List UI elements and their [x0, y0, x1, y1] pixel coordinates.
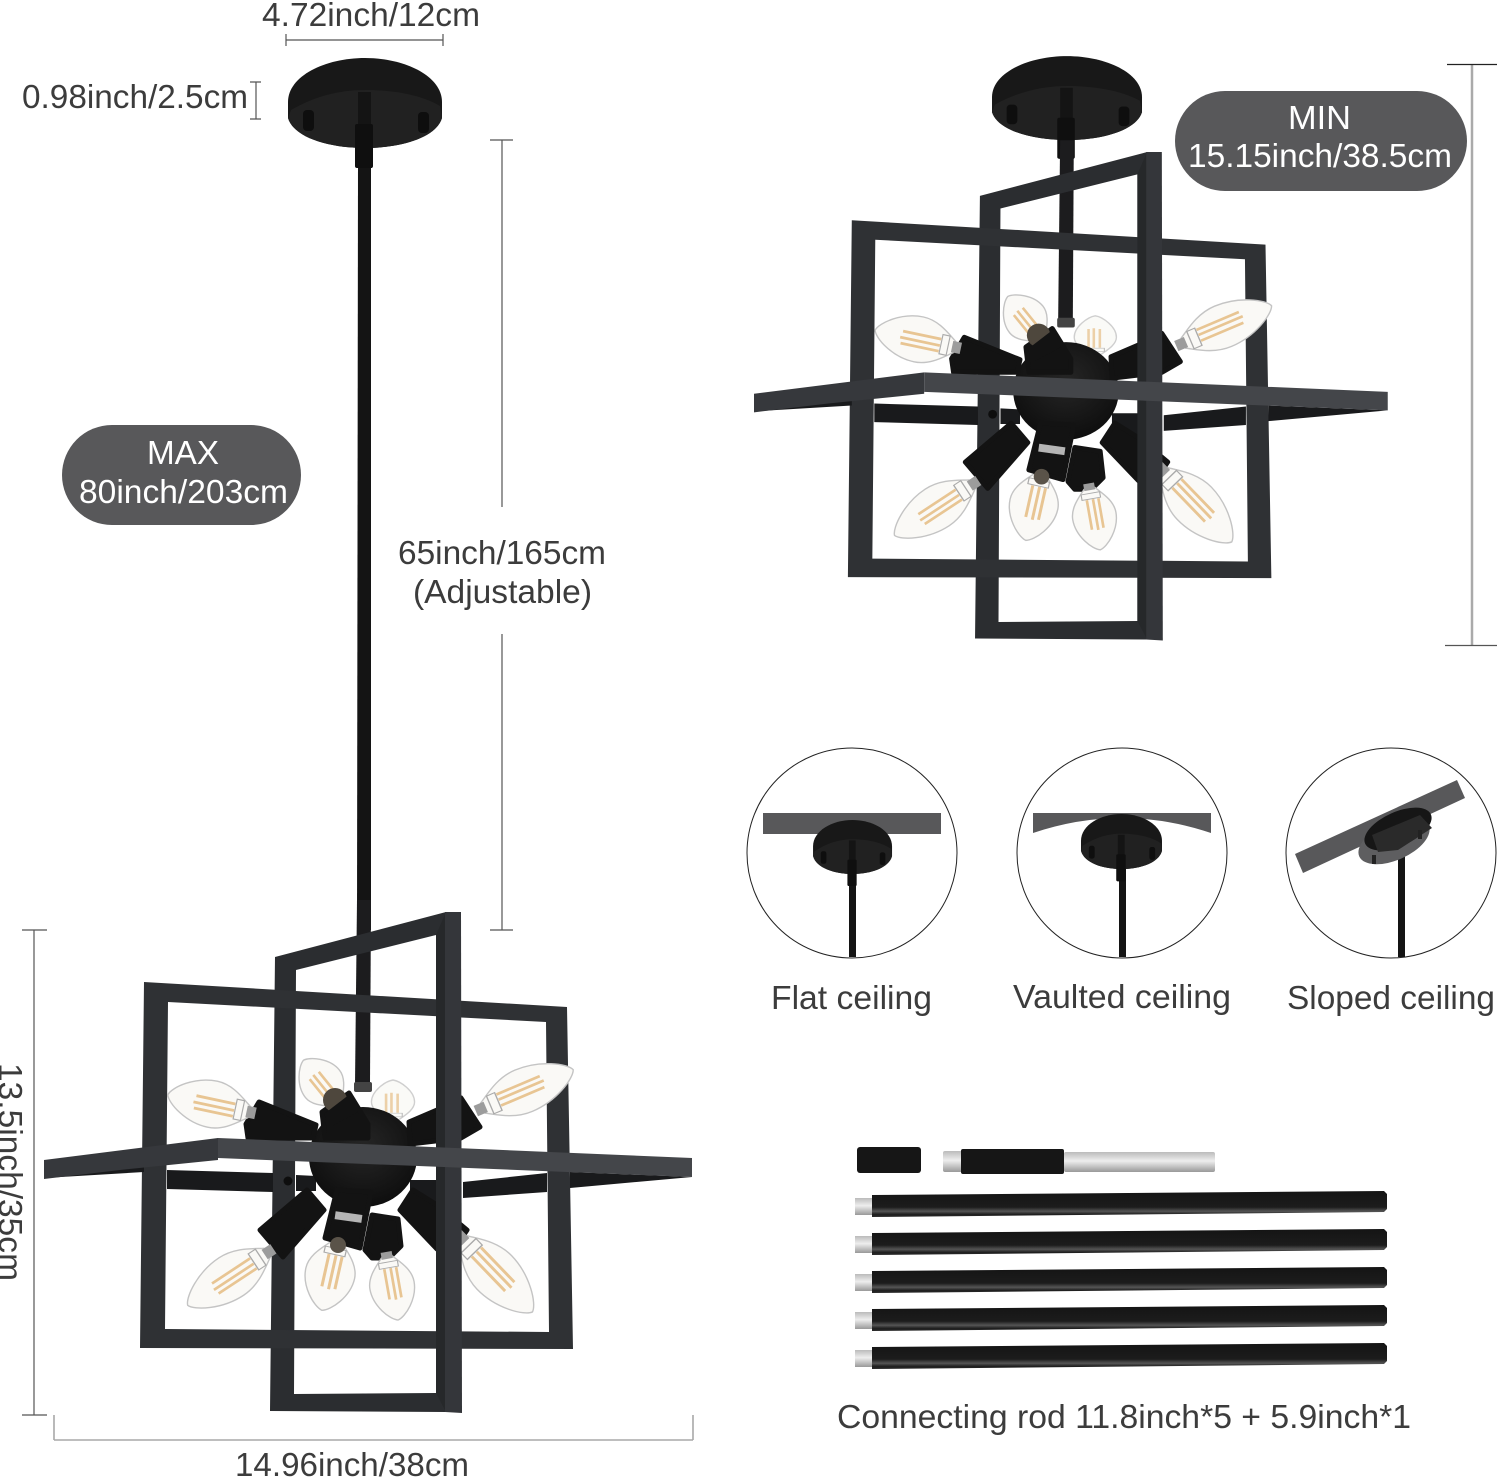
- panel: flat ceiling: [747, 748, 957, 1016]
- lamp: minimum height semi-flush: [754, 56, 1388, 640]
- flat front frame: [44, 1138, 692, 1179]
- label: sloped ceiling: Sloped ceiling: [1287, 979, 1495, 1016]
- label: flat ceiling: Flat ceiling: [771, 979, 932, 1016]
- dimension: lamp width: [54, 1415, 693, 1480]
- dimension: lamp height: [0, 930, 47, 1415]
- callout: min height: MIN: [1288, 99, 1351, 136]
- rear bulb: [371, 1080, 415, 1123]
- dimension: adjustable rod length: (Adjustable): [413, 573, 592, 610]
- coupler: [857, 1147, 921, 1173]
- collar: [354, 1082, 372, 1092]
- rod and canopy: [992, 56, 1142, 159]
- sockets: [246, 1093, 480, 1258]
- wide square frame: [140, 982, 573, 1349]
- dimension: adjustable rod length: [398, 140, 606, 930]
- callout: min height: 15.15inch/38.5cm: [1188, 137, 1452, 174]
- callout: max height: 80inch/203cm: [79, 473, 288, 510]
- screw: [284, 1176, 292, 1186]
- centre rod: [355, 900, 371, 1084]
- label: connecting rods: Connecting rod 11.8inch*5 + 5.9inch*1: [837, 1398, 1411, 1435]
- canopy: [288, 58, 442, 168]
- callout: max height: [62, 425, 301, 525]
- dimension: adjustable rod length: 65inch/165cm: [398, 534, 606, 571]
- label: vaulted ceiling: Vaulted ceiling: [1013, 978, 1231, 1015]
- callout: min height: [1175, 91, 1467, 191]
- lamp: maximum height pendant: [44, 58, 692, 1413]
- lamp frame and bulbs: [44, 900, 692, 1413]
- central ball: [309, 1107, 417, 1207]
- short rod with silver end: [943, 1149, 1215, 1174]
- rod: [357, 160, 371, 930]
- dimension: canopy height: 0.98inch/2.5cm: [22, 78, 248, 115]
- callout: max height: MAX: [147, 434, 219, 471]
- lamp frame and bulbs copy: [754, 140, 1388, 640]
- panel: connecting rods: [837, 1147, 1411, 1435]
- dimension: min height bracket: [1445, 64, 1497, 646]
- panel: vaulted ceiling: [1013, 748, 1231, 1015]
- long rods: [855, 1191, 1387, 1369]
- panel: sloped ceiling: [1286, 748, 1496, 1016]
- rear flat bars: [44, 1166, 692, 1204]
- tall rear frame: [270, 912, 446, 1412]
- front post: [436, 912, 462, 1413]
- front lower socket: [323, 1088, 371, 1253]
- bulbs: [163, 1047, 582, 1329]
